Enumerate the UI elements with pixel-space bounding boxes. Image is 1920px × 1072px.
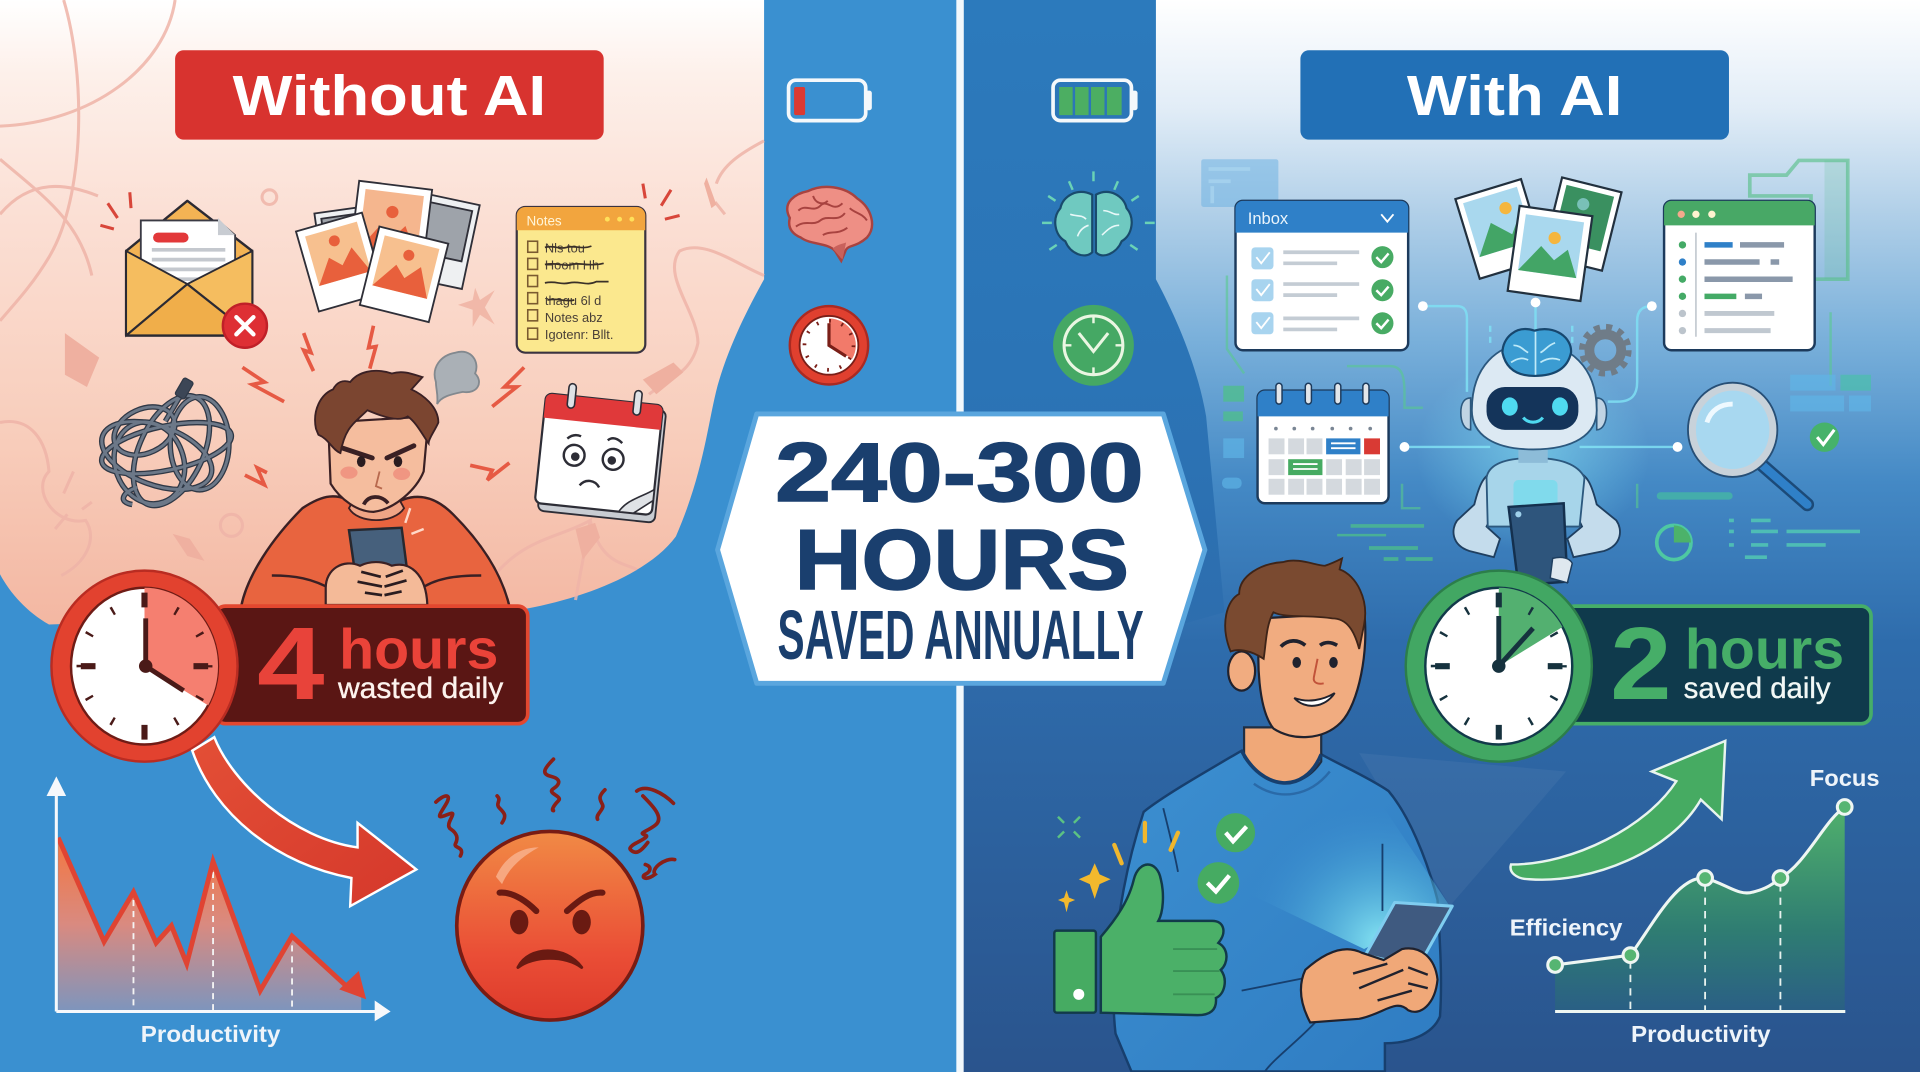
panel: sticky notes: Hoom Hh [545,257,599,272]
icon: magnifying glass [1688,383,1807,505]
chart: falling productivity [47,776,391,1047]
panel: organized code window [1664,201,1815,350]
label: Focus: Focus [1810,765,1880,791]
icon: full battery [1053,80,1138,121]
panel: left background [0,0,960,1072]
decorations: stress bolts [242,326,524,485]
panel: center stat hexagon [718,414,1205,683]
panel: sticky notes [517,184,680,353]
icon: messy photos [296,181,480,322]
stat: 2: 2 [1610,606,1671,721]
heading: With AI: With AI [1407,64,1622,127]
label: Productivity: Productivity [141,1021,280,1047]
illustration: robot assistant [1417,327,1649,585]
panel: right background [960,0,1920,1072]
heading: Without AI: Without AI [233,64,546,127]
icon: sad calendar [534,381,668,523]
illustration: happy person [1113,558,1452,1071]
panel: sticky notes: thagu 6l d [545,293,601,308]
icon: ordered photos [1455,177,1622,301]
icon: clock 2 hours [1406,571,1592,762]
icon: clock 4 hours [51,571,238,762]
stat: HOURS: HOURS [795,512,1129,608]
panel: sticky notes: Notes abz [545,310,603,325]
stat: SAVED ANNUALLY: SAVED ANNUALLY [778,596,1144,674]
label: hours: hours [339,618,498,681]
icon: red clock [790,306,868,385]
decoration: faded panels and circuits [1201,159,1871,561]
label: wasted daily: wasted daily [337,672,504,705]
arrow: upward green curve [1511,741,1725,880]
icon: green clock [1053,305,1134,386]
divider [956,0,964,1072]
panel: organized inbox: Inbox [1248,209,1289,228]
icon: envelope with error [100,192,267,348]
label: Efficiency: Efficiency [1510,915,1623,941]
icon: green thumbs up [1054,813,1255,1015]
arrow: downward red curve [192,737,416,906]
chart: rising productivity [1510,765,1880,1047]
panel: sticky notes: Igotenr: Bllt. [545,327,613,342]
panel: organized inbox [1236,201,1408,350]
label: Productivity: Productivity [1631,1021,1771,1047]
icon: tidy calendar [1258,383,1389,503]
illustration: frustrated person [241,371,509,606]
heading: Without AI [175,50,604,140]
stat: 240-300: 240-300 [775,426,1144,519]
icon: steam cloud [435,352,479,404]
icon: angry face [436,759,675,1020]
heading: With AI [1300,50,1729,140]
panel: sticky notes: Nls tou [545,240,585,255]
stat badge: 2 hours saved daily [1565,606,1871,724]
label: hours: hours [1685,618,1844,681]
icon: tired brain [787,187,872,261]
panel: sticky notes: Notes [527,213,562,228]
icon: tangled cables [93,377,236,517]
icon: low battery [789,80,872,121]
stat badge: 4 hours wasted daily [216,606,528,724]
stat: 4: 4 [257,606,324,721]
icon: glowing brain [1042,171,1155,255]
label: saved daily: saved daily [1684,672,1831,705]
